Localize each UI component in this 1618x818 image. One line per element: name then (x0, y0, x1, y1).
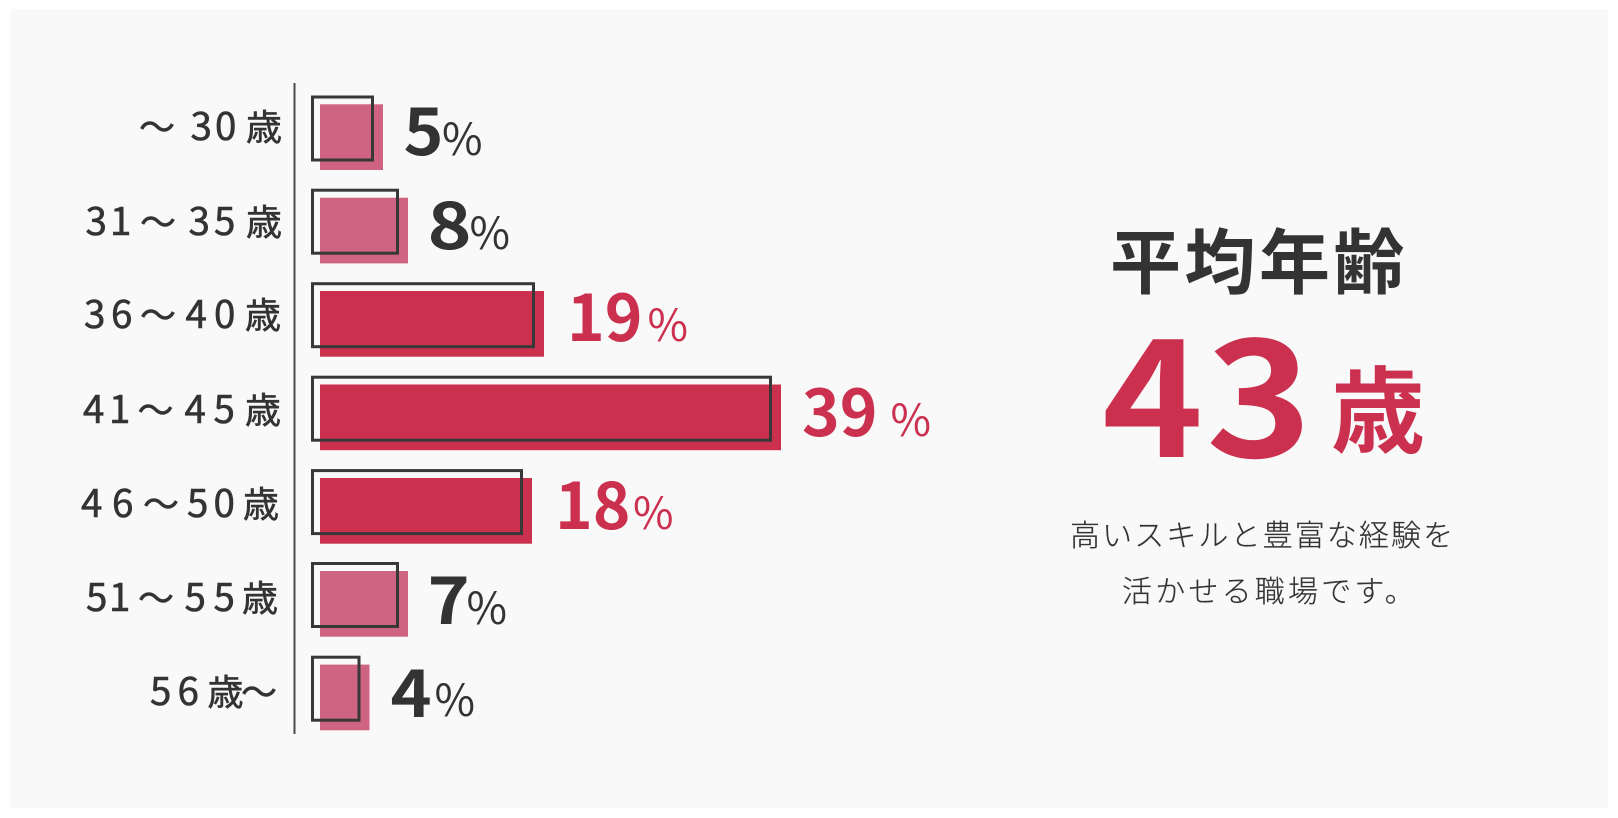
big number: 43 years: 4 (1102, 273, 1203, 503)
chart: age distribution bar chart (81, 81, 931, 736)
label: 40 (186, 284, 235, 340)
axis line (294, 83, 296, 734)
bar (320, 571, 408, 637)
label: 〜 (241, 664, 277, 716)
value (567, 268, 688, 360)
label: 歳 (208, 664, 244, 716)
value (390, 643, 475, 736)
bar frame (312, 97, 372, 160)
row: 56 and over (150, 643, 475, 736)
label: 50 (187, 473, 235, 529)
bar (320, 198, 408, 263)
label: 30 (190, 96, 236, 152)
row: 31 to 35 (86, 175, 510, 268)
bar frame (312, 564, 398, 626)
label: 〜 (140, 194, 176, 246)
value: % (466, 573, 507, 637)
label: 歳 (246, 99, 282, 151)
label: 46 (81, 473, 133, 529)
line 2: 活かせる職場です。 (1122, 567, 1418, 611)
value: 18 (555, 456, 631, 548)
description (1070, 511, 1455, 611)
value (802, 363, 931, 455)
average age panel (1070, 207, 1455, 611)
bar (320, 384, 781, 450)
row: 51 to 55 (86, 550, 507, 643)
bar frame (312, 377, 770, 440)
label: 〜 (138, 570, 174, 622)
label: 歳 (245, 287, 281, 339)
value: % (470, 198, 510, 262)
row: 36 to 40 (84, 268, 688, 360)
big number: 43 years (1102, 272, 1425, 503)
label: 〜 (138, 382, 174, 434)
value: % (890, 385, 931, 449)
label: 〜 (140, 287, 176, 339)
bar (320, 665, 370, 730)
row: up to 30 (139, 81, 483, 173)
label: 55 (184, 567, 235, 623)
bar frame (312, 471, 522, 534)
label: 51 (86, 567, 130, 623)
row: 41 to 45 (83, 363, 931, 455)
value (555, 456, 674, 548)
bar frame (312, 657, 359, 720)
label: 45 (184, 379, 235, 435)
bar frame (312, 284, 534, 347)
line 1: 高いスキルと豊富な経験を (1070, 511, 1455, 555)
label: 歳 (242, 570, 278, 622)
value (428, 550, 507, 643)
label: 歳 (246, 194, 282, 246)
value: % (434, 665, 475, 729)
value: 19 (567, 268, 643, 360)
value: 39 (802, 363, 878, 455)
big number: 43 years: 3 (1206, 272, 1312, 503)
value: 4 (390, 643, 432, 736)
label: 56 (150, 661, 199, 717)
bar (320, 291, 544, 357)
value: % (648, 290, 688, 354)
value: 5 (404, 81, 444, 173)
value (428, 175, 510, 268)
value (404, 81, 483, 173)
bar (320, 104, 383, 170)
big number: 43 years: 歳 (1331, 337, 1425, 473)
label: 31 (86, 191, 131, 247)
bar (320, 478, 532, 544)
label: 〜 (139, 99, 175, 151)
row: 46 to 50 (81, 456, 674, 548)
value: 7 (428, 550, 470, 643)
label: 〜 (143, 476, 179, 528)
value: % (633, 478, 674, 542)
label: 35 (188, 191, 235, 247)
label: 歳 (245, 382, 281, 434)
value: % (442, 104, 483, 168)
value: 8 (428, 175, 472, 268)
heading: 平均年齢 (1110, 207, 1405, 309)
label: 41 (83, 379, 130, 435)
bar frame (312, 190, 398, 253)
label: 歳 (243, 476, 279, 528)
label: 36 (84, 284, 132, 340)
